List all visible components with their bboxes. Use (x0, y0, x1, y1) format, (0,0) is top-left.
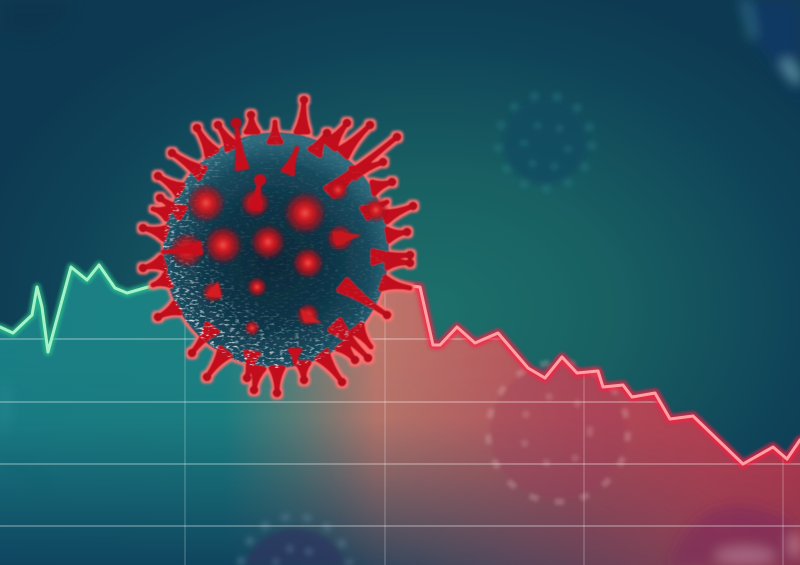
chart area under line (0, 268, 800, 565)
background virus: left edge (0, 375, 50, 485)
virus (143, 100, 413, 393)
virus inner spikes and red nodes (163, 118, 389, 363)
chart grid lines (0, 292, 800, 565)
virus surface fur texture (163, 132, 389, 368)
background virus: top right (735, 0, 800, 100)
background virus: bottom centre (240, 516, 350, 565)
background virus: top centre (498, 95, 592, 189)
red falling line (385, 284, 800, 464)
background virus: bottom right (670, 505, 800, 565)
green rising line (0, 265, 170, 352)
background virus: top left (0, 0, 75, 40)
background virus: inside red area (488, 362, 628, 502)
virus silhouette with spikes and glow (143, 100, 413, 393)
